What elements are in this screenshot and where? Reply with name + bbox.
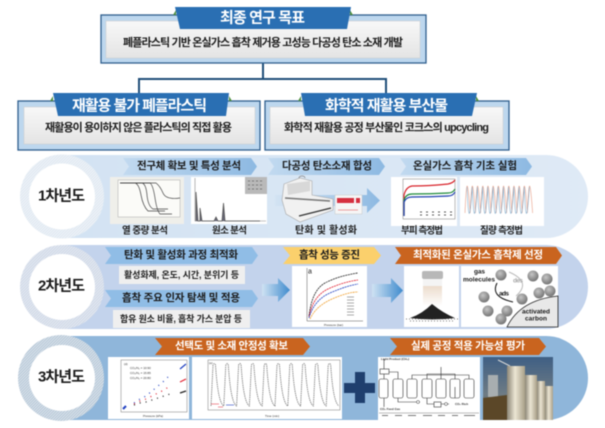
diagram: gas adsorption: ads (499, 290, 509, 298)
step: real process feasibility: 실제 공정 적용 가능성 평가 (411, 339, 525, 352)
text box: activation conditions: 활성화제, 온도, 시간, 분위기 등 (124, 269, 239, 280)
image: storage silos (483, 357, 553, 420)
label: carbonization: 탄화 및 활성화 (295, 224, 357, 236)
step: carbonization optimization (105, 247, 258, 264)
panel: year 3 (18, 335, 588, 421)
step: porous carbon synthesis (268, 158, 385, 175)
diagram: gas adsorption: activated (522, 308, 550, 316)
step: porous carbon synthesis: 다공성 탄소소재 합성 (282, 159, 372, 172)
step: adsorption experiments (400, 158, 532, 175)
step: optimal adsorbent selection (395, 247, 562, 264)
step: precursor analysis (123, 158, 257, 175)
text: coke upcycling: 화학적 재활용 공정 부산물인 코크스의 upcycling (284, 120, 489, 134)
step: precursor analysis: 전구체 확보 및 특성 분석 (137, 159, 241, 172)
chart: weight cycles over time: Time (min) (265, 414, 279, 418)
label: elemental analysis: 원소 분석 (212, 224, 247, 236)
step: adsorption factors: 흡착 주요 인자 탐색 및 적용 (122, 291, 240, 304)
panel: year 2 (20, 245, 588, 329)
icon: tube furnace (282, 176, 333, 222)
chart: gravimetric cycles (460, 177, 544, 226)
chart: adsorption isotherms: Pressure (bar) (324, 323, 343, 327)
icon: activation device (335, 195, 362, 214)
heading banner: by-product: 화학적 재활용 부산물 (325, 98, 448, 114)
label: thermogravimetric: 열 중량 분석 (122, 224, 168, 236)
chart: adsorption isotherms (292, 266, 367, 327)
panel: chemical recycling by-product (265, 93, 509, 150)
badge: year 1 (20, 154, 104, 238)
panel: non-recyclable waste plastic (18, 93, 260, 150)
badge: year 3 (18, 335, 104, 421)
chart: weight cycles over time (192, 357, 342, 419)
arrow: behind furnace to device (275, 188, 380, 213)
chart: selectivity versus pressure: Pressure (kPa) (143, 414, 163, 418)
diagram: gas adsorption (461, 266, 558, 327)
heading banner: non-recyclable plastic (53, 93, 229, 116)
diagram: gas adsorption: carbon (525, 316, 547, 322)
chart: selectivity versus pressure: (d) (124, 362, 128, 366)
badge: year 1: 1차년도 (38, 188, 85, 204)
text: goal description: 폐플라스틱 기반 온실가스 흡착 제거용 고성능 다공성 탄소 소재 개발 (123, 35, 403, 49)
badge: year 2 (20, 245, 104, 329)
step: adsorption experiments: 온실가스 흡착 기초 실험 (413, 159, 517, 172)
chart: adsorption isotherms: a (308, 268, 312, 276)
chart: selectivity versus pressure: CO₂/N₂ = 15:85 (130, 371, 151, 375)
diagram: gas adsorption: des (513, 278, 523, 284)
chart: thermogravimetric analysis (110, 177, 184, 224)
chart: selectivity versus pressure (108, 357, 189, 419)
step: real process feasibility (390, 338, 546, 355)
text box: element ratio (113, 310, 250, 328)
label: gravimetric: 질량 측정법 (480, 224, 523, 236)
step: adsorption performance (283, 247, 381, 264)
heading banner: final goal: 최종 연구 목표 (220, 10, 305, 26)
chart: elemental analysis (191, 177, 267, 224)
diagram: gas adsorption: gas (474, 268, 485, 276)
icon: plus sign (344, 372, 375, 403)
text box: activation conditions (119, 266, 245, 284)
diagram: pressure swing adsorption process (378, 357, 480, 420)
diagram: pressure swing adsorption process: CO₂ Feed Gas (380, 407, 401, 411)
step: adsorption factors (105, 290, 258, 307)
diagram: gas adsorption: molecules (463, 276, 495, 284)
step: adsorption performance: 흡착 성능 증진 (299, 248, 360, 261)
chart: volumetric isotherm (391, 177, 457, 226)
step: selectivity and stability (155, 338, 310, 355)
text: direct use of plastics: 재활용이 용이하지 않은 플라스틱의 직접 활용 (45, 120, 232, 134)
heading banner: final goal (175, 7, 351, 29)
panel: final research goal (101, 7, 426, 63)
text box: element ratio: 함유 원소 비율, 흡착 가스 분압 등 (120, 313, 242, 324)
label: volumetric: 부피 측정법 (401, 224, 443, 236)
chart: selectivity versus pressure: CO₂/N₂ = 20:80 (130, 376, 151, 380)
badge: year 2: 2차년도 (38, 278, 85, 294)
chart: selectivity versus pressure: CO₂/N₂ = 10:90 (130, 366, 151, 370)
step: carbonization optimization: 탄화 및 활성화 과정 최적화 (124, 248, 238, 261)
step: selectivity and stability: 선택도 및 소재 안정성 확보 (175, 339, 288, 352)
connector lines (139, 63, 386, 94)
diagram: pressure swing adsorption process: Light Product (CH₄) (381, 357, 409, 361)
badge: year 3: 3차년도 (38, 368, 85, 386)
heading banner: by-product (301, 93, 477, 116)
image: carbon powder (404, 266, 459, 327)
step: optimal adsorbent selection: 최적화된 온실가스 흡착제 선정 (413, 248, 543, 261)
panel: year 1 (20, 154, 588, 238)
arrow: to adsorption performance (262, 278, 290, 302)
chart: weight cycles over time: (e) (209, 361, 213, 365)
diagram: pressure swing adsorption process: CO₂ Rich (455, 402, 468, 406)
arrow: to optimal adsorbent (372, 278, 403, 303)
heading banner: non-recyclable plastic: 재활용 불가 폐플라스틱 (72, 98, 207, 114)
